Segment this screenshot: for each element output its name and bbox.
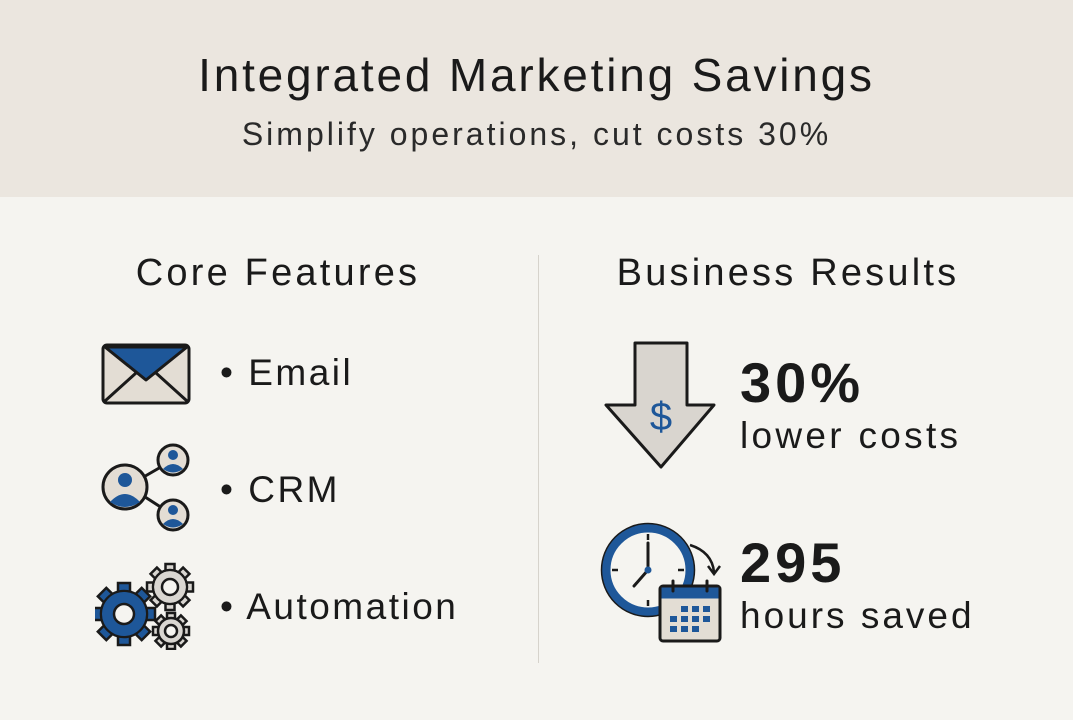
stat: 30% lower costs: lower costs xyxy=(740,415,961,456)
stat: 295 hours saved: hours saved xyxy=(740,595,975,636)
icon: envelope xyxy=(102,344,190,404)
title: Integrated Marketing Savings xyxy=(198,49,875,101)
feature: email: • Email xyxy=(220,352,353,393)
heading: business results: Business Results xyxy=(617,252,959,294)
feature: crm: • CRM xyxy=(220,469,340,510)
icon: down arrow with dollar xyxy=(604,342,716,469)
heading: core features: Core Features xyxy=(136,252,420,294)
header band xyxy=(0,0,1073,197)
stat: 295 hours saved: 295 xyxy=(740,531,845,594)
icon: gears xyxy=(95,562,194,650)
stat: 30% lower costs: 30% xyxy=(740,351,864,414)
stat: 295 hours saved xyxy=(740,531,975,636)
icon: clock and calendar xyxy=(600,522,722,642)
stat: 30% lower costs xyxy=(740,351,961,456)
icon: down arrow with dollar: $ xyxy=(650,395,672,439)
subtitle: Simplify operations, cut costs 30% xyxy=(242,116,831,152)
feature: automation: • Automation xyxy=(220,586,458,627)
icon: crm network xyxy=(102,444,190,532)
